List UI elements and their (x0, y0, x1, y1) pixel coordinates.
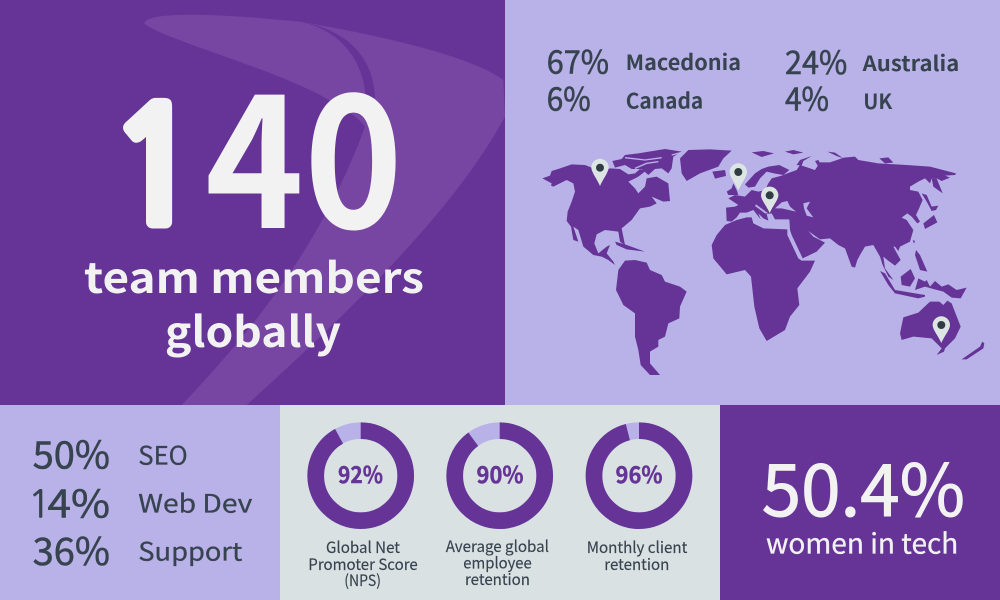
inland seas (755, 201, 813, 217)
caption: NPS: Global Net (326, 536, 400, 558)
caption: employee retention: Average global (446, 535, 549, 557)
stat 50.4%: 50.4% (762, 432, 965, 537)
department statistics: Web Dev (138, 485, 252, 521)
department statistics: 1 (28, 485, 51, 523)
panel: departments (0, 405, 280, 600)
department statistics (28, 424, 252, 576)
pin: Macedonia (761, 187, 778, 213)
caption: NPS: Promoter Score (308, 553, 418, 575)
country statistics (547, 37, 959, 121)
country statistics: Macedonia (626, 47, 741, 77)
department statistics: 4% (48, 473, 110, 528)
country statistics: 67% (547, 37, 609, 83)
panel: retention metrics (280, 405, 720, 600)
donut: 92% NPS: 92% (338, 456, 383, 490)
caption: team members globally (84, 245, 424, 360)
department statistics: Support (138, 533, 243, 569)
pin: Australia (933, 316, 950, 343)
country statistics: Australia (862, 48, 959, 78)
caption: NPS: (NPS) (344, 569, 381, 591)
panel: world map and countries (505, 0, 1000, 405)
big number 140: 1 (107, 88, 204, 248)
panel: women in tech (720, 405, 1000, 600)
country statistics: 4% (785, 75, 829, 121)
donut: 96% client retention: 96% (616, 456, 662, 490)
country statistics: Canada (626, 85, 703, 115)
caption: women in tech: women in tech (766, 522, 958, 562)
country statistics: UK (863, 86, 893, 116)
South America (616, 260, 687, 375)
caption: team members globally: team members (84, 245, 424, 306)
Arctic channels (625, 152, 682, 168)
department statistics: 50% (33, 424, 110, 479)
caption: employee retention: employee (463, 552, 532, 574)
boomerang watermark (144, 15, 505, 405)
caption: client retention: Monthly client (587, 536, 687, 558)
pin: Canada (591, 159, 609, 186)
caption: NPS (308, 536, 418, 591)
caption: client retention (587, 536, 687, 575)
caption: employee retention: retention (465, 568, 530, 590)
caption: employee retention (446, 535, 549, 590)
caption: team members globally: globally (165, 299, 341, 360)
donut: 92% NPS (316, 431, 406, 521)
donut: 90% employee retention (455, 431, 545, 521)
panel: team members (0, 0, 505, 405)
caption: client retention: retention (604, 553, 669, 575)
big number 140: 40 (205, 19, 403, 280)
donut: 96% client retention (594, 431, 684, 521)
world map (527, 149, 984, 375)
department statistics: 36% (33, 521, 110, 576)
department statistics: SEO (138, 436, 188, 472)
country statistics: 6% (547, 75, 591, 121)
pin: UK (730, 163, 747, 190)
donut: 90% employee retention: 90% (476, 456, 524, 490)
Africa, Eurasia and Oceania (712, 150, 984, 359)
country statistics: 24% (785, 38, 847, 84)
North America and Greenland (527, 149, 732, 265)
